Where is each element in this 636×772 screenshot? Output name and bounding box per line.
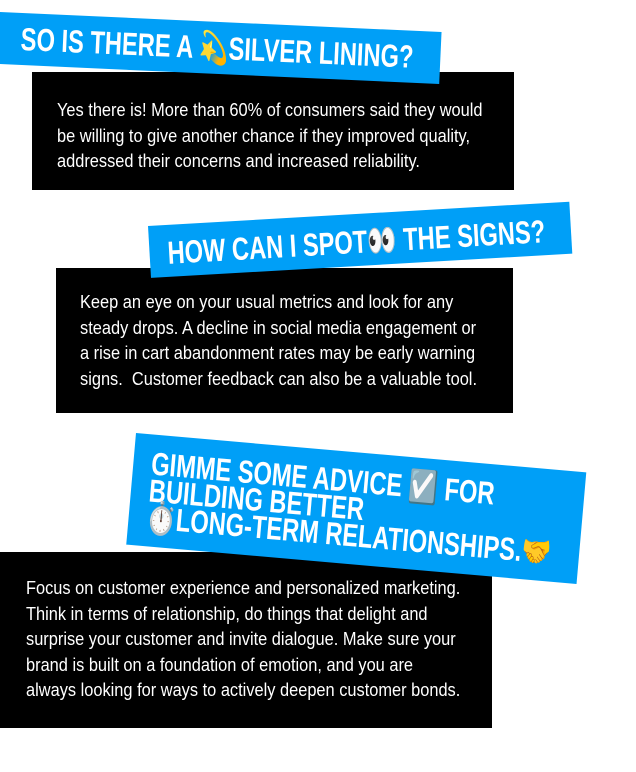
panel: spot the signs text box xyxy=(56,268,513,413)
heading banner: advice: ⏱️LONG-TERM RELATIONSHIPS.🤝 xyxy=(145,499,553,571)
text: signs body: steady drops. A decline in social media engagement or xyxy=(80,318,476,338)
text: silver lining body: addressed their concerns and increased reliability. xyxy=(57,151,420,171)
text: silver lining body xyxy=(57,100,483,171)
text: signs body xyxy=(80,292,477,389)
heading banner: silver lining: SO IS THERE A 💫SILVER LINING? xyxy=(20,21,414,75)
heading banner: advice xyxy=(126,433,586,584)
heading banner: advice: BUILDING BETTER xyxy=(147,472,366,527)
text: silver lining body: be willing to give another chance if they improved quality, xyxy=(57,126,470,146)
heading banner: spot the signs: HOW CAN I SPOT👀 THE SIGNS? xyxy=(167,213,546,271)
text: advice body: Focus on customer experience and personalized marketing. xyxy=(26,578,460,598)
text: signs body: a rise in cart abandonment rates may be early warning xyxy=(80,343,475,363)
heading banner: spot the signs xyxy=(148,202,572,278)
text: signs body: Keep an eye on your usual metrics and look for any xyxy=(80,292,453,312)
heading banner: advice: GIMME SOME ADVICE ☑️ FOR xyxy=(150,446,496,511)
panel: advice text box xyxy=(0,552,492,728)
heading banner: silver lining xyxy=(0,12,442,84)
text: silver lining body: Yes there is! More than 60% of consumers said they would xyxy=(57,100,483,120)
text: signs body: signs. Customer feedback can also be a valuable tool. xyxy=(80,368,477,388)
text: advice body xyxy=(26,578,460,700)
panel: silver lining text box xyxy=(32,72,514,190)
text: advice body: surprise your customer and invite dialogue. Make sure your xyxy=(26,629,456,649)
text: advice body: Think in terms of relationship, do things that delight and xyxy=(26,604,428,624)
text: advice body: always looking for ways to actively deepen customer bonds. xyxy=(26,680,460,700)
text: advice body: brand is built on a foundation of emotion, and you are xyxy=(26,654,413,674)
